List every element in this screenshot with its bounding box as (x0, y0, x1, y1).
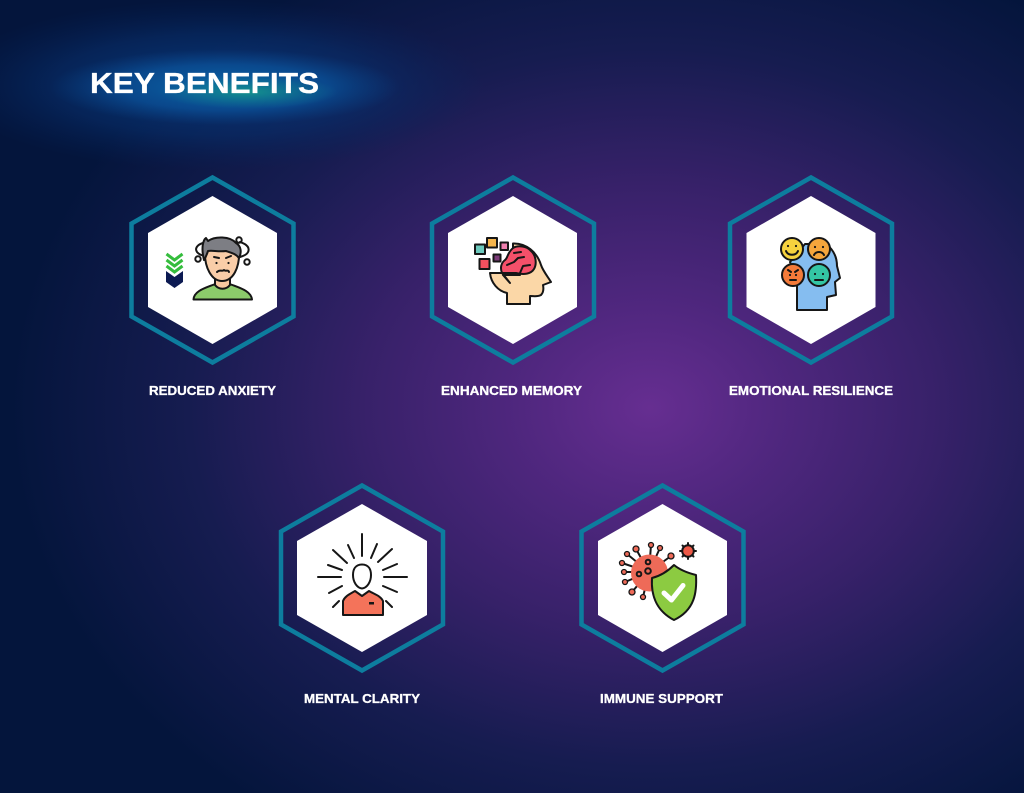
hexagon badge (746, 196, 876, 344)
hexagon badge (148, 196, 277, 344)
hexagon frame (582, 486, 744, 670)
title: KEY BENEFITS (90, 68, 319, 100)
label: reduced anxiety: REDUCED ANXIETY (149, 383, 276, 398)
label: immune support: IMMUNE SUPPORT (600, 691, 723, 706)
hexagon frame (281, 486, 443, 670)
panel: enhanced memory (432, 178, 594, 362)
label: enhanced memory: ENHANCED MEMORY (441, 383, 582, 398)
panel: reduced anxiety (132, 178, 294, 362)
hexagon frame (730, 178, 892, 362)
hexagon frame (132, 178, 294, 362)
panel: emotional resilience (730, 178, 892, 362)
icon: head with dissolving brain (475, 238, 551, 304)
title glow (0, 0, 500, 170)
hexagon frame (432, 178, 594, 362)
icon: head with four emotion faces (781, 238, 840, 310)
panel: mental clarity (281, 486, 443, 670)
label: mental clarity: MENTAL CLARITY (304, 691, 420, 706)
icon: virus and shield (620, 542, 696, 620)
hexagon badge (297, 504, 427, 652)
icon: stress-down chevrons and person (166, 237, 252, 300)
hexagon badge (598, 504, 727, 652)
icon: radiant person (318, 534, 407, 615)
panel: immune support (582, 486, 744, 670)
hexagon badge (448, 196, 577, 344)
label: emotional resilience: EMOTIONAL RESILIENCE (729, 383, 893, 398)
